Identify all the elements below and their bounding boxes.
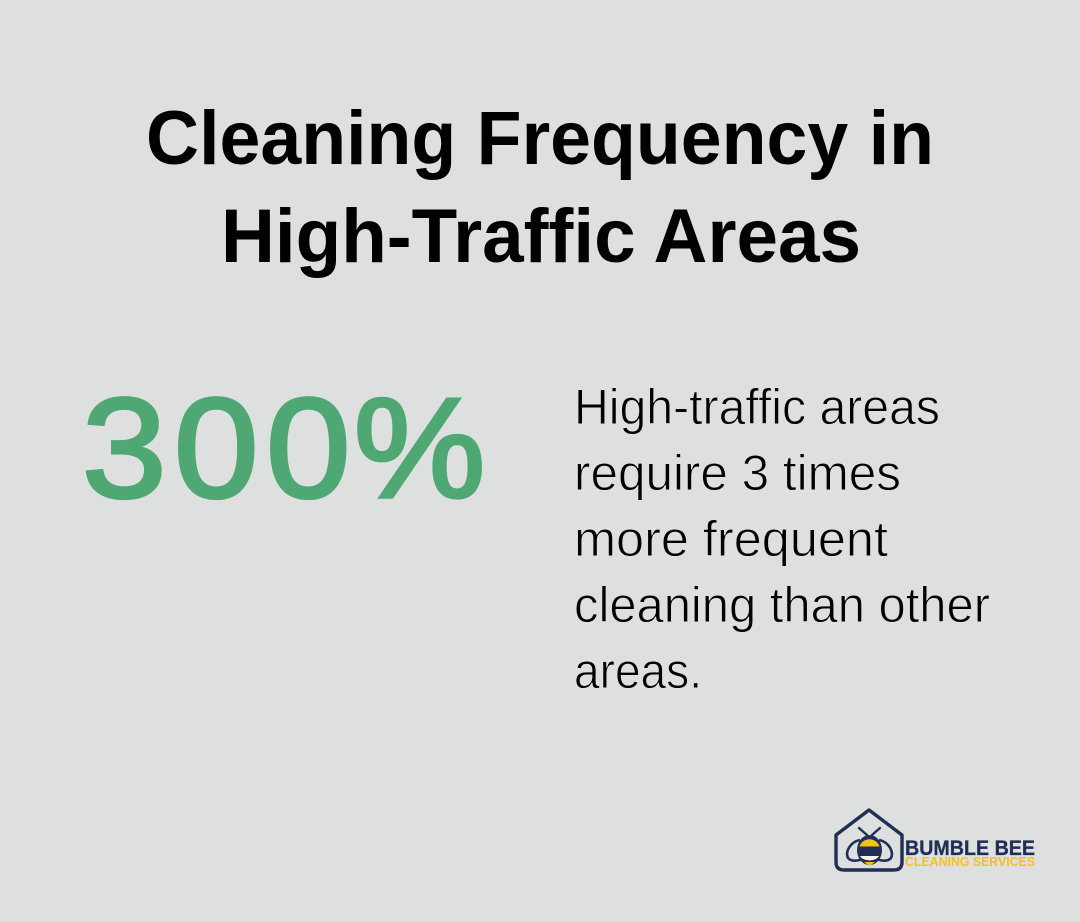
statistic: 300%: % [354, 370, 485, 528]
description text [574, 379, 990, 699]
description text: cleaning than other [574, 577, 990, 633]
title [146, 96, 934, 279]
logo tagline: CLEANING SERVICES [905, 855, 1035, 869]
statistic: 300%: 0 [266, 370, 351, 528]
title: Cleaning Frequency in [146, 96, 934, 181]
statistic: 300%: 3 [82, 370, 166, 528]
icon: bee [847, 828, 892, 866]
statistic: 300%: 0 [174, 370, 259, 528]
description text: require 3 times [574, 445, 901, 501]
title: High-Traffic Areas [221, 194, 861, 279]
logo wordmark: BUMBLE BEE [905, 837, 1035, 860]
description text: areas. [574, 643, 702, 699]
logo: Bumble Bee Cleaning Services [836, 810, 1035, 870]
icon: house outline [836, 810, 902, 870]
description text: High-traffic areas [574, 379, 940, 435]
description text: more frequent [574, 511, 888, 567]
